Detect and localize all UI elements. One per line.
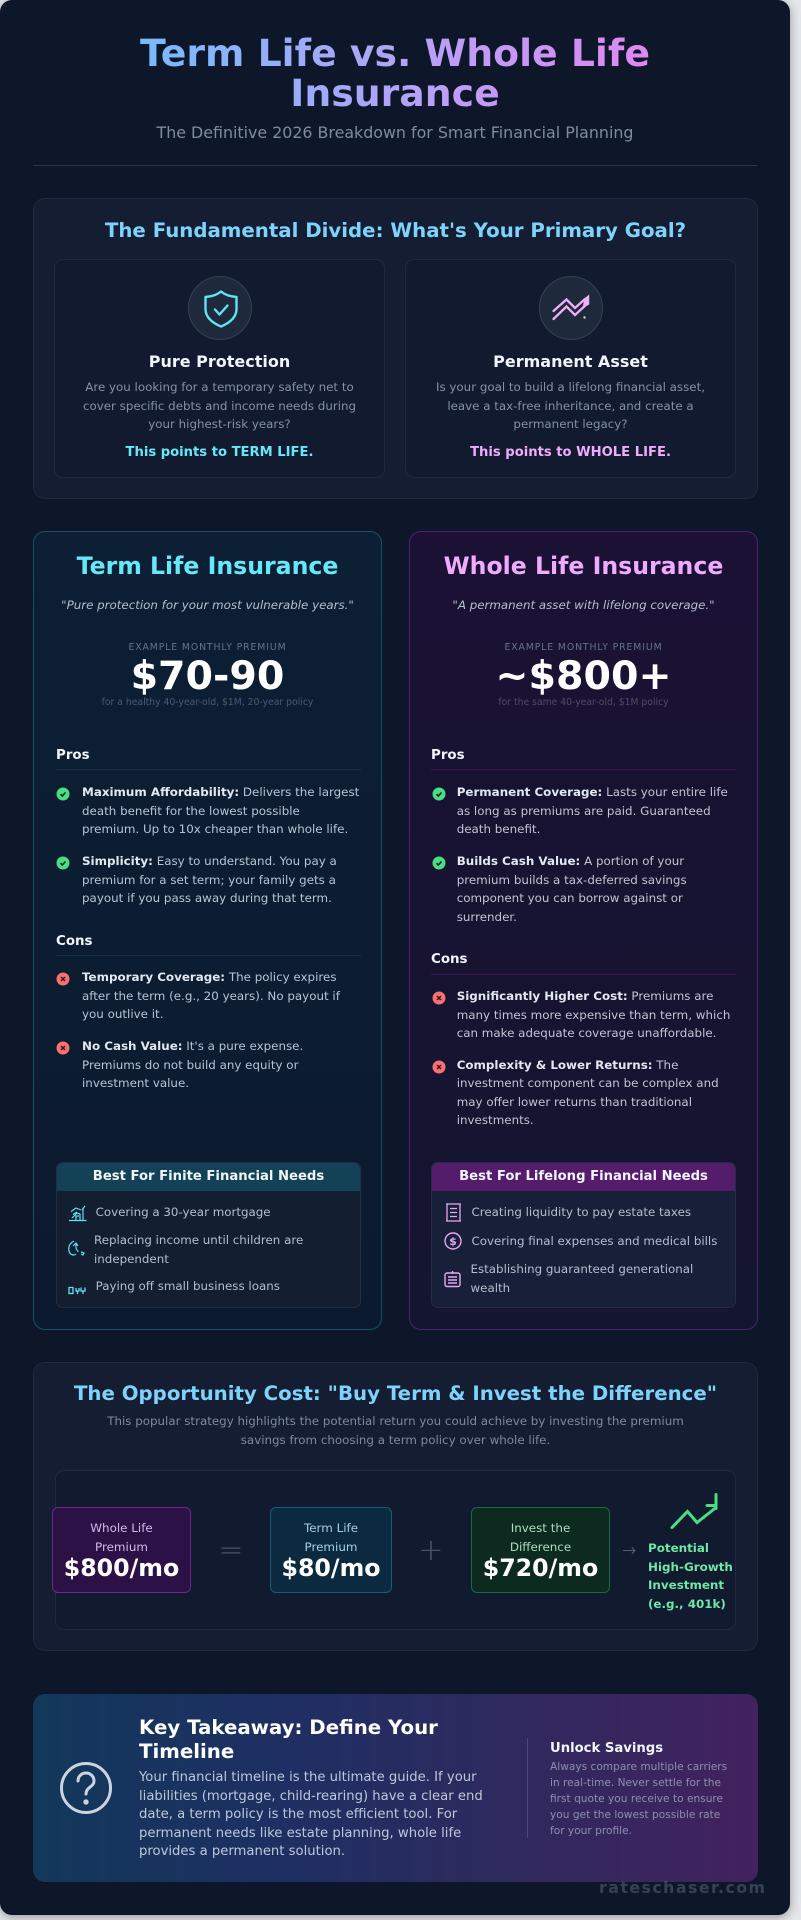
header: best for: Best For Lifelong Financial Needs [459,1169,708,1184]
header: best for [431,1162,736,1191]
list item: Replacing income until children are [94,1233,303,1247]
icon: shield [188,276,252,340]
list item: Covering final expenses and medical bills [472,1234,717,1248]
title: Term Life vs. Whole Life [140,31,650,75]
heading: opportunity cost: The Opportunity Cost: "Buy Term & Invest the Difference" [74,1382,717,1405]
label: example premium: EXAMPLE MONTHLY PREMIUM [128,642,286,652]
list item [470,1262,693,1294]
icon: family [68,1240,85,1256]
title [33,33,757,113]
icon: check [432,856,446,870]
text: unlock savings: you get the lowest possible rate [550,1809,720,1821]
con item: Complexity & Lower Returns: The [457,1058,678,1072]
label: example premium: EXAMPLE MONTHLY PREMIUM [504,642,662,652]
pro item: payout if you pass away during that term. [82,891,332,905]
pro item [82,854,337,905]
label: Term Life [304,1521,358,1535]
box: invest the difference [471,1507,610,1593]
heading: key takeaway: Key Takeaway: Define Your [139,1716,438,1739]
icon: dollar: $ [449,1235,457,1248]
text: key takeaway: Your financial timeline is the ultimate guide. If your [139,1770,477,1785]
heading: term life: Term Life Insurance [77,552,338,580]
text: potential investment: Potential [648,1541,709,1555]
pro item: premium for a set term; your family gets a [82,872,336,886]
text: pure protection [83,380,356,431]
list item: independent [94,1252,169,1266]
list item: Covering a 30-year mortgage [96,1205,271,1219]
value: $720/mo [483,1554,598,1582]
pro item: Simplicity: Easy to understand. You pay a [82,854,337,868]
con item [82,1039,303,1090]
text: potential investment: Investment [648,1578,724,1592]
pro item [457,854,687,924]
panel: fundamental divide [33,198,758,499]
subtitle: The Definitive 2026 Breakdown for Smart Financial Planning [157,123,633,142]
heading: pros: Pros [431,748,465,763]
heading: whole life: Whole Life Insurance [444,552,723,580]
watermark: rateschaser.com [599,1878,766,1897]
con item: may offer lower returns than traditional [457,1094,692,1108]
heading: key takeaway: Timeline [139,1740,234,1763]
con item: investment value. [82,1076,189,1090]
list item: Paying off small business loans [96,1279,280,1293]
text: strategy explanation [107,1414,684,1446]
heading: cons: Cons [56,934,93,949]
con item: after the term (e.g., 20 years). No payout if [82,988,340,1002]
panel: best for lifelong needs [431,1162,736,1308]
heading: fundamental divide: The Fundamental Divide: What's Your Primary Goal? [105,219,686,242]
con item: No Cash Value: It's a pure expense. [82,1039,303,1053]
con item: can make adequate coverage unaffordable. [457,1026,716,1040]
label: Premium [95,1540,148,1554]
icon: question mark [60,1762,112,1814]
icon: cross [56,1042,70,1054]
text: permanent asset: Is your goal to build a lifelong financial asset, [436,380,705,394]
box: term life premium [270,1507,392,1593]
text: key takeaway: liabilities (mortgage, child-rearing) have a clear end [139,1788,483,1804]
con item: Significantly Higher Cost: Premiums are [457,989,713,1003]
text: key takeaway: provides a permanent solution. [139,1844,345,1859]
panel: key takeaway [33,1694,758,1882]
text: potential investment: High-Growth [648,1560,733,1574]
label: Whole Life [90,1521,153,1535]
icon: clipboard [444,1271,461,1288]
text: key takeaway [139,1770,483,1859]
text: points to whole life: This points to WHOLE LIFE. [470,445,671,460]
label: Invest the [511,1521,570,1535]
price: $70-90 [131,653,284,699]
label [90,1521,153,1554]
heading: permanent asset: Permanent Asset [493,352,648,371]
pro item [457,785,728,836]
con item [457,1058,719,1127]
title: Insurance [290,71,500,115]
icon: house [69,1206,86,1222]
callout: unlock savings [550,1741,727,1837]
text: potential investment: (e.g., 401k) [648,1596,726,1610]
text: permanent asset: leave a tax-free inheritance, and create a [447,398,694,412]
value: $80/mo [281,1554,381,1582]
text: permanent asset: permanent legacy? [513,417,628,431]
panel: opportunity cost [33,1362,758,1651]
header: best for: Best For Finite Financial Needs [93,1169,324,1184]
icon: cross [432,1060,446,1074]
note: for a healthy 40-year-old, $1M, 20-year policy [102,697,313,708]
icon: check [56,856,70,870]
icon: dollar [444,1232,462,1250]
icon: cross [432,992,446,1004]
text: unlock savings: first quote you receive to ensure [550,1793,723,1805]
pro item: premium. Up to 10x cheaper than whole life. [82,822,348,836]
pro item: death benefit for the lowest possible [82,804,300,818]
text: points to term life: This points to TERM LIFE. [126,445,314,460]
text: unlock savings: for your profile. [550,1825,632,1837]
list item: wealth [470,1280,510,1294]
label: Premium [305,1540,357,1554]
text: pure protection: cover specific debts and income needs during [83,398,356,412]
text: pure protection: Are you looking for a temporary safety net to [85,380,354,394]
icon: growth line [670,1493,718,1530]
text: key takeaway: date, a term policy is the most efficient tool. For [139,1807,457,1822]
card: permanent asset [405,259,736,478]
pro item: component you can borrow against or [457,891,683,905]
pro item: premium builds a tax-deferred savings [457,872,687,886]
panel: term life insurance [33,531,382,1330]
arrow: → [622,1541,636,1561]
con item [82,970,340,1021]
con item: Temporary Coverage: The policy expires [82,970,337,984]
quote: "Pure protection for your most vulnerable years." [61,598,354,612]
list item: Creating liquidity to pay estate taxes [472,1205,691,1219]
list item [94,1233,303,1266]
heading: key takeaway [139,1716,438,1763]
icon: check [56,788,70,800]
pro item: Maximum Affordability: Delivers the largest [82,785,359,799]
icon: document [446,1203,461,1222]
label [304,1521,358,1554]
heading: pros: Pros [56,748,90,763]
pro item [82,785,359,836]
con item: many times more expensive than term, which [457,1008,730,1022]
header: best for [56,1162,361,1191]
text: unlock savings [550,1761,727,1837]
operator: plus: + [418,1533,444,1568]
icon: cross [56,972,70,986]
pro item: as long as premiums are paid. Guaranteed [457,804,711,818]
text: strategy explanation: This popular strategy highlights the potential return you could achieve by investing the premium [107,1414,684,1428]
text: key takeaway: permanent needs like estate planning, whole life [139,1826,461,1840]
icon: business [68,1286,86,1294]
panel: best for finite needs [56,1162,361,1308]
text: strategy explanation: savings from choosing a term policy over whole life. [241,1432,550,1446]
panel: whole life insurance [409,531,758,1330]
note: for the same 40-year-old, $1M policy [498,697,669,708]
value: $800/mo [64,1554,179,1582]
list item: Establishing guaranteed generational [470,1262,693,1276]
price: ~$800+ [495,653,672,699]
text: unlock savings: in real-time. Never settle for the [550,1777,721,1789]
con item [457,989,730,1040]
con item: you outlive it. [82,1007,163,1021]
operator: equals: = [218,1533,244,1568]
pro item: Permanent Coverage: Lasts your entire life [457,785,728,799]
pro item: surrender. [457,910,517,924]
con item: investment component can be complex and [457,1076,719,1090]
box: whole life premium [52,1507,191,1593]
quote: "A permanent asset with lifelong coverage." [452,598,715,612]
heading: unlock savings: Unlock Savings [550,1741,663,1756]
con item: Premiums do not build any equity or [82,1058,298,1072]
pro item: Builds Cash Value: A portion of your [457,854,684,868]
label [510,1521,571,1554]
equation flow [55,1470,736,1630]
text: potential investment [648,1541,733,1610]
text: unlock savings: Always compare multiple carriers [550,1761,727,1773]
pro item: death benefit. [457,822,540,836]
heading: cons: Cons [431,952,468,967]
card: pure protection [54,259,385,478]
icon: check [432,788,446,800]
heading: pure protection: Pure Protection [149,352,290,371]
label: Difference [510,1540,571,1554]
text: permanent asset [436,380,705,431]
icon: growth chart [539,276,603,340]
text: pure protection: your highest-risk years? [148,417,291,431]
con item: investments. [457,1113,534,1127]
